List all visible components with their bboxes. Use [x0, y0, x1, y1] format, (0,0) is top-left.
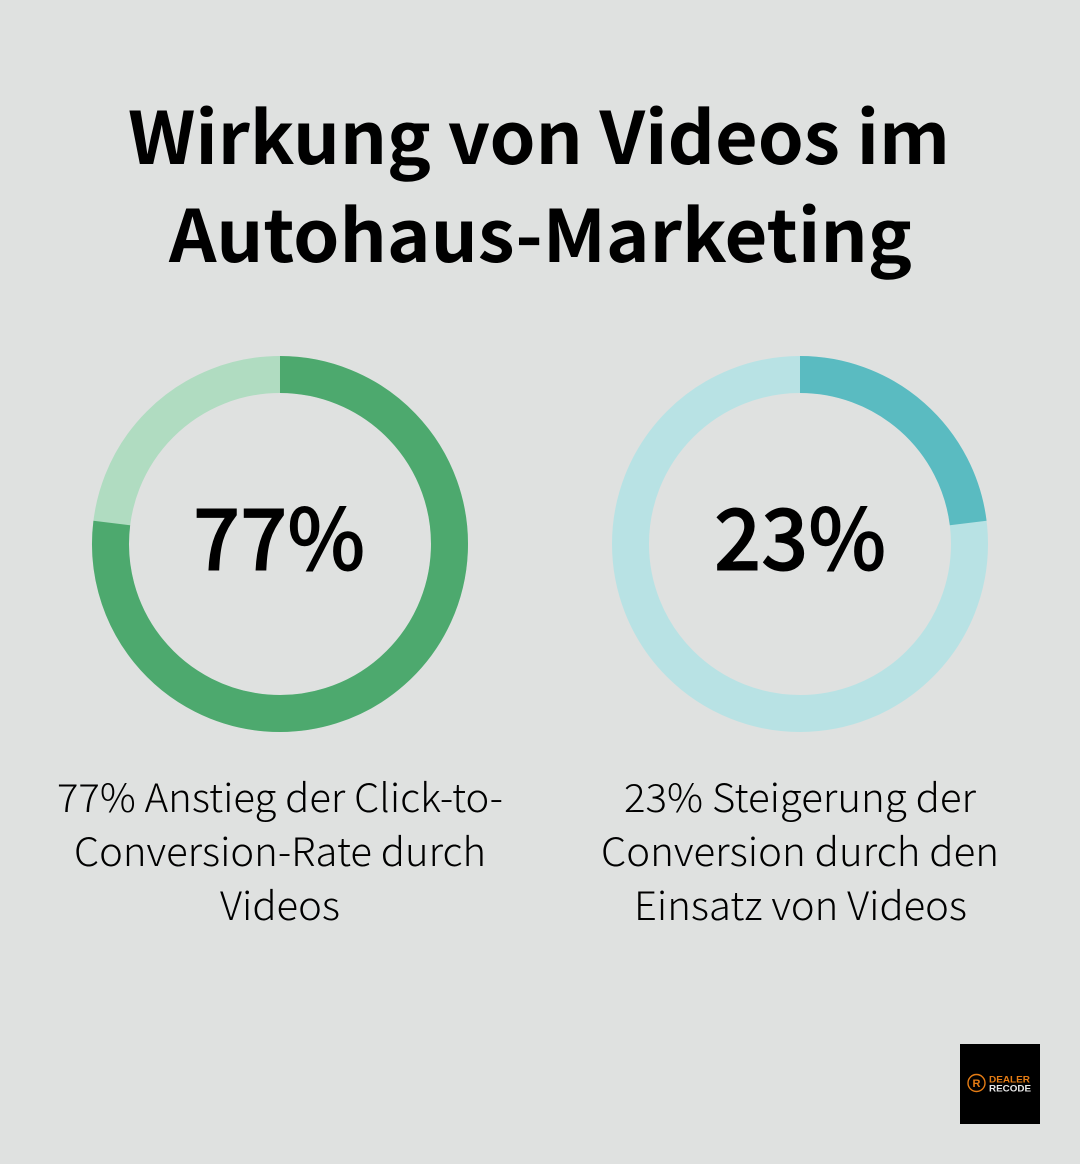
title: Autohaus-Marketing	[168, 178, 912, 283]
description: 77%	[57, 768, 503, 932]
logo: Dealer Recode: DEALER	[989, 1074, 1030, 1086]
donut chart: 77%	[110, 374, 449, 714]
panel: 23% statistic	[601, 374, 999, 932]
title	[128, 80, 950, 283]
title: Wirkung von Videos im	[128, 80, 950, 185]
description: 77%: Videos	[220, 876, 340, 932]
description: 77%: 77% Anstieg der Click-to-	[57, 768, 503, 824]
donut chart: 23%	[630, 374, 970, 714]
logo: Dealer Recode: R	[973, 1078, 981, 1090]
description: 23%: Conversion durch den	[601, 822, 999, 878]
value: 23%: 23%	[714, 472, 886, 595]
description: 23%	[601, 768, 999, 932]
logo: Dealer Recode: RECODE	[989, 1084, 1031, 1094]
description: 23%: 23% Steigerung der	[624, 768, 977, 824]
description: 77%: Conversion-Rate durch	[74, 822, 486, 878]
panel: 77% statistic	[57, 374, 503, 932]
logo: Dealer Recode	[960, 1044, 1040, 1124]
value: 77%: 77%	[193, 472, 365, 595]
description: 23%: Einsatz von Videos	[634, 876, 967, 932]
